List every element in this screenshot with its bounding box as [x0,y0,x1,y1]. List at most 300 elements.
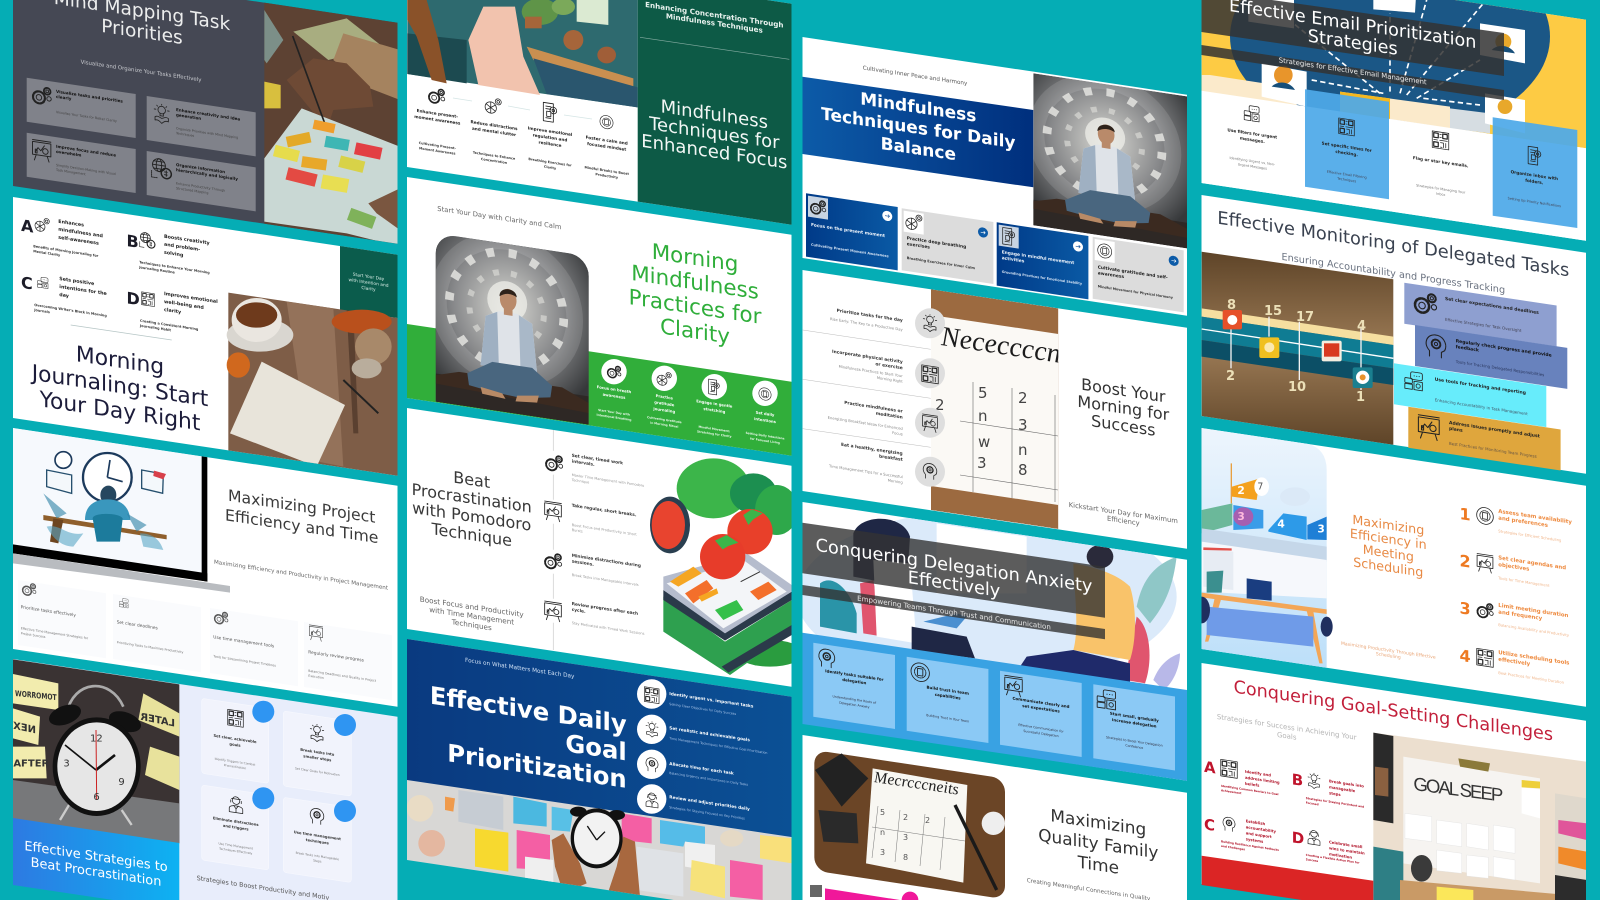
title: Meeting [1363,543,1414,565]
title: Scheduling [1353,555,1423,581]
icon [646,757,658,772]
text: techniques [306,838,330,846]
text A: Enhances [58,220,84,229]
panel: effective strategies to beat procrastination [6,659,397,900]
title: Mindfulness [661,96,768,133]
image: woman at desk [407,0,638,107]
sub: Balancing Urgency and Importance in Daily Tasks [669,771,748,787]
sub: Building Resilience Against Setbacks [1221,839,1279,852]
sub: Strategies to Boost Your Delegation [1106,735,1163,748]
text: moment awareness [414,114,461,126]
card text: Organize information [176,162,225,174]
sub: Rise Early: The Key to a Productive Day [830,317,903,332]
sub A: Mental Clarity [33,249,61,257]
sub: Breathing Exercises for Inner Calm [907,256,975,270]
image: alarm clock and sticky notes: WORROMOT [15,689,57,702]
panel: maximizing efficiency in meeting scheduling [1193,428,1586,707]
panel: effective monitoring of delegated tasks [1202,195,1586,474]
sub: Breathing Exercises for [528,157,572,168]
panel: maximizing quality family time [802,735,1187,900]
item 1 [414,88,461,156]
icon [1098,243,1112,259]
sub: Delegation Anxiety [839,701,870,709]
heading: activities [1002,255,1025,265]
image: notepad on wooden desk: 8 [903,853,908,862]
title: Success [1091,411,1155,440]
icon [1477,648,1493,667]
title: Techniques for [648,113,780,154]
card 3 [1394,363,1546,427]
icon [1097,689,1116,710]
image: calendar desk illustration: 3 [1237,510,1245,523]
card subtext: Task Management [55,168,86,176]
title: Conquering Goal-Setting Challenges [1234,678,1553,745]
text: Set clear agendas and [1498,555,1566,571]
card 2 text: Set clear deadlines [117,619,158,632]
text: Reduce distractions [470,119,518,131]
subtitle: Enhancing Concentration Through [645,0,784,30]
sub: Identify Triggers to Combat [215,757,255,767]
red footer bar [1202,856,1373,900]
icon [923,463,937,480]
card 1 [1227,105,1277,172]
card text: generation [176,112,201,121]
sub: Best Practices for Monitoring Team Progress [1449,441,1537,459]
card 1 [18,580,106,658]
sub: in Morning Ritual [650,421,678,429]
title: Efficiency in [1350,527,1427,553]
card 1 sub: Project Success [21,631,46,639]
subtitle band [1202,45,1504,100]
intro line: Focus on What Matters Most Each Day [465,658,575,680]
step 2 [541,500,637,542]
text: Start small, gradually [1110,711,1159,723]
heading: awareness [1098,270,1124,280]
image: meditating man [1033,71,1187,248]
text: accountability [1246,824,1277,834]
icon [1477,602,1493,619]
sub: Setting Up Priority Notifications [1508,196,1561,208]
subtitle: Visualize and Organize Your Tasks Effectively [81,59,202,84]
title: Techniques for Daily [821,104,1015,153]
image: alarm clock and sticky notes: AFTER [13,759,50,770]
item A: A [1204,758,1216,777]
image: alarm clock and sticky notes: 12 [90,734,103,745]
card text: overwhelm [56,149,81,158]
text: Identify and [1245,769,1271,778]
card 4 sub: Balancing Deadlines and Quality in Project [308,669,376,683]
subtitle band [802,585,1105,639]
text: Identify urgent vs. important tasks [669,691,754,710]
icon [309,625,323,642]
icon: brain [35,217,49,233]
text: Break goals into [1329,778,1364,789]
title: Morning [652,240,738,277]
icon [608,365,621,379]
icon [545,552,562,570]
subtitle: Scheduling [1376,651,1401,661]
icon [1221,759,1237,778]
text D: Improves emotional [164,292,218,305]
sub: Set Clear Goals for Motivation [295,766,340,777]
box: green tagline [340,246,398,318]
panel: mindfulness techniques for enhanced focus [407,0,792,225]
image: hand placing sticky notes [264,0,400,247]
sub: Concentration [481,157,508,165]
image: alarm clock and sticky notes: LATER [140,712,175,730]
text: Use tools for tracking and reporting [1435,377,1526,396]
heading: exercises [907,241,930,251]
title text: Effective Strategies to [24,839,168,875]
sub B: Journaling Routine [138,265,176,275]
title: Priorities [101,16,183,49]
icon [1223,816,1235,832]
sub C: Overcoming Writer's Block in Morning [34,303,107,318]
subtitle: Goals [1277,730,1297,742]
heading: Cultivate gratitude and self- [1098,265,1168,281]
text: meditation [876,411,903,421]
sub: Cultivating Present- [419,141,456,150]
card 2 [1415,325,1567,389]
sub: Best Practices for Meeting Duration [1498,671,1565,685]
sub D: Journaling Habit [139,324,171,332]
sub: Energizing Breakfast Ideas for Enhanced [828,416,903,431]
title: Journaling: Start [30,361,209,412]
title: Time [1077,853,1119,879]
icon: globe [152,158,171,180]
panel: effective email prioritization [1202,0,1587,241]
image: handwritten table on wood: n [1018,441,1028,459]
step 2: 2 [1460,551,1471,572]
item 2 [470,97,518,166]
accent circle [252,787,274,809]
sub: Inbox [1436,192,1445,197]
text: Identify tasks suitable for [825,668,883,682]
white lower band [1202,91,1586,241]
sub: Time Management Techniques for Effective Goal Prioritization [668,736,767,755]
title: Clarity [660,314,730,350]
image: handwritten table on wood: 5 [978,384,988,402]
subtitle: Strategies for Effective Email Management [1279,56,1427,86]
subtitle: with Time Management [429,605,514,627]
sub: Confidence [1125,743,1143,750]
title: Effective Daily [430,681,627,739]
icon [1477,506,1493,525]
item B [126,231,210,280]
sub: Use Time Management [218,841,253,851]
sub: Techniques [1336,176,1356,183]
icon [709,379,719,395]
item A [21,216,104,263]
title: Effective Monitoring of Delegated Tasks [1217,208,1569,281]
image: handwritten table on wood: 2 [935,396,945,414]
image: handwritten table on wood: w [978,433,990,451]
card subtext: Structured Mapping [176,186,208,195]
card 2 [113,594,201,672]
image: notepad on wooden desk: Mecrcccneits [873,769,959,799]
text: messages. [1240,135,1265,144]
image: timeline on wood: 15 [1264,304,1282,319]
icon [1418,415,1439,441]
image: handwritten table on wood: 3 [1018,416,1028,434]
sub: Tools for Time Management [1497,576,1550,588]
icon [1339,118,1354,136]
icon [646,792,658,808]
text: Allocate time for each task [669,761,734,777]
text: resilience [539,140,562,148]
image: notepad on wooden desk: 2 [925,816,930,825]
sub: Strategies for Staying Persistent and [1306,796,1364,809]
title: with Pomodoro [412,498,531,535]
text: Practice [656,393,673,401]
sub: Cultivating Gratitude [647,415,682,424]
text: Foster a calm and [586,135,628,146]
text: address limiting [1245,775,1280,785]
card 3 sub: Tools for Streamlining Project Timelines [212,654,276,668]
text B: Boosts creativity [164,235,210,247]
image: sticky notes and clock [407,790,792,900]
text D: well-being and [164,299,204,311]
icon [310,808,324,825]
item 4 [828,442,945,487]
sub: Master Time Management with Pomodoro [572,473,644,488]
banner: title [13,818,179,900]
text: systems [1246,836,1264,844]
sub: Effective Strategies for Task Oversight [1445,317,1522,333]
icon: gears [33,86,51,105]
text: Review progress after each [572,602,638,617]
text: Review and adjust priorities daily [669,794,750,812]
text: journaling [652,406,675,414]
sub: Time Management Tips for a Successful [829,464,903,479]
title: Mindfulness [860,89,976,127]
sub: Techniques to Enhance [473,151,515,161]
sub: for Focused Living [750,436,780,445]
image: timeline on wood: 1 [1356,390,1365,405]
icon [819,648,835,668]
heading: Practice deep breathing [907,236,966,250]
image: notepad on wooden desk: n [880,828,885,837]
text: Assess team availability [1498,509,1572,526]
image: handwritten table on wood: n [978,407,988,425]
image: calendar desk illustration: 3 [1317,523,1325,536]
sub: Achievement [1221,788,1242,795]
card text: hierarchically and logically [176,167,238,182]
text: Set specific times for [1322,141,1372,153]
text: smaller steps [303,754,332,763]
illustration: tomato book [650,458,803,675]
sub: Mindfulness Practices to Start Your [839,365,903,378]
icon [922,365,938,384]
accent circle [334,714,356,736]
image: handwritten table on wood: Nececcccnci [940,321,1081,373]
image: alarm clock and sticky notes [6,659,179,843]
title: Procrastination [412,480,532,517]
sub: Identifying Urgent vs. Non- [1229,156,1275,167]
text B: and problem- [164,242,200,253]
sub: Identifying Common Barriers to Goal [1221,784,1279,796]
card: visualize [27,78,136,138]
text: Build trust in team [927,684,969,696]
sub: Tools for Tracking Delegated Responsibilities [1455,359,1544,377]
sub: Break Tasks into Manageable Intervals [572,573,639,587]
card: break tasks [283,711,356,796]
icon [646,721,658,738]
sub: Effective Email Filtering [1327,170,1367,180]
image: goal board on wall: GOAL SEEP [1413,773,1503,806]
text: set expectations [1022,703,1060,714]
card subtext: Organize Priorities with Mind Mapping [176,126,238,140]
green band [407,324,792,456]
sub A: Benefits of Morning Journaling for [33,244,98,258]
right green panel [638,0,792,225]
title: Conquering Delegation Anxiety [816,535,1092,597]
icon [923,313,937,333]
icon [657,371,671,387]
text: gratitude [654,399,675,407]
panel: morning journaling [13,197,400,480]
text: Use filters for urgent [1227,127,1277,140]
card 3 text: Use time management tools [213,634,275,650]
title: Beat [453,468,490,492]
card 2 [907,657,988,743]
heading: Engage in mindful movement [1002,250,1074,266]
image: meditating man [436,231,589,425]
card 3 [997,222,1088,299]
arrow [978,227,988,238]
image: timeline on wood [1202,252,1393,445]
text: Set clear, timed work [572,454,623,466]
step 1 [542,451,644,493]
text: Celebrate small [1329,839,1362,849]
text: steps [1329,790,1341,797]
text: beliefs [1245,781,1260,788]
sub B: Techniques to Enhance Your Morning [139,260,210,275]
item C: C [1204,815,1215,835]
item A [1204,758,1280,801]
icon [759,387,771,401]
subtitle: Maximizing Efficiency and Productivity in Project Management [214,560,389,592]
text: awareness [603,392,626,400]
image: notepad on wooden desk: 5 [880,808,885,817]
sub: Boost Focus and Productivity in Short [572,523,637,537]
text: Set realistic and achievable goals [669,725,750,743]
item C [1204,815,1279,857]
text: Organize inbox with [1511,169,1558,181]
icon: board [33,139,51,162]
text: Minimize distractions during [572,554,641,569]
title band [802,523,1105,618]
subtitle: Boost Focus and Productivity [420,595,524,619]
blue band [802,633,1187,781]
image: timeline on wood: 17 [1296,310,1314,325]
text: Eliminate distractions [213,816,259,827]
item D: D [1292,828,1304,848]
text: Set clear expectations and deadlines [1445,296,1539,316]
icon [906,213,922,231]
image: handwritten table on wood: 3 [977,454,987,472]
icon [546,454,563,472]
sub: Mindful Movement for Physical Harmony [1098,284,1174,300]
card 1 [1404,283,1557,347]
text: goals [229,742,241,748]
title: Maximizing [1352,513,1424,539]
text: Enhance present- [417,108,458,119]
icon [1528,146,1541,166]
card text: Visualize tasks and priorities [56,89,123,104]
card: eliminate distractions [202,785,274,870]
title: Quality Family [1038,826,1158,863]
item B [1292,770,1364,813]
text: and mental clutter [472,126,517,137]
step 3 [1460,598,1570,638]
icon [215,611,228,625]
card 4 text: Regularly review progress [308,649,365,664]
card subtext: Visualize Your Tasks for Better Clarity [56,110,117,123]
panel: conquering delegation anxiety [797,502,1187,781]
text C: intentions for the [59,284,107,297]
sub: Effective Communication for [1018,723,1064,734]
text: breakfast [879,453,903,463]
icon: qr [142,292,154,307]
text: Flag or star key emails. [1413,155,1469,169]
sub: Balancing Availability and Productivity [1498,623,1570,638]
subtitle: Empowering Teams Through Trust and Communication [857,594,1051,632]
card: focus [27,133,136,193]
title: Morning [76,342,164,380]
sub: Clarity [544,165,557,171]
title: Balance [881,134,956,165]
sub: Setting Clear Objectives for Daily Success [669,702,736,716]
step 4: 4 [1460,646,1471,666]
text: focused mindset [587,141,626,152]
image: goal board on wall [1373,733,1587,900]
icon [1308,830,1320,845]
text: Use time management [294,830,341,841]
item D [1292,828,1365,869]
sub: Success [1306,857,1319,863]
card 1 sub: Effective Time Management Strategies for [21,626,88,640]
panel: mindfulness techniques for daily balance [802,37,1187,316]
image: timeline on wood: 2 [1226,369,1235,384]
image: alarm clock and sticky notes: 3 [63,759,70,770]
subtitle: Cultivating Inner Peace and Harmony [863,65,968,87]
icon [119,598,128,608]
row 1 [637,679,754,716]
text: checking. [1335,149,1358,157]
sub: Techniques Effectively [218,846,252,856]
text: cycle. [572,607,586,615]
heading: Focus on the present moment [811,222,885,239]
icon [1477,554,1493,573]
item 4 [584,115,629,181]
icon [23,582,36,596]
panel: maximizing project efficiency [13,428,397,707]
accent circle [252,701,274,723]
sub: Morning Right [877,376,903,384]
sub: Strategies for Efficient Scheduling [1498,529,1562,543]
title: Your Day Right [39,387,201,436]
sub: Grounding Practices for Emotional Stability [1002,270,1083,286]
card 1 [813,643,895,729]
text: Utilize scheduling tools [1498,650,1569,667]
text: Set clear, achievable [213,734,257,744]
item D [126,288,218,337]
text: intentions [754,416,777,424]
panel: conquering goal-setting challenges [1202,663,1587,900]
step 3 [541,550,641,587]
step 4 [1460,646,1569,685]
